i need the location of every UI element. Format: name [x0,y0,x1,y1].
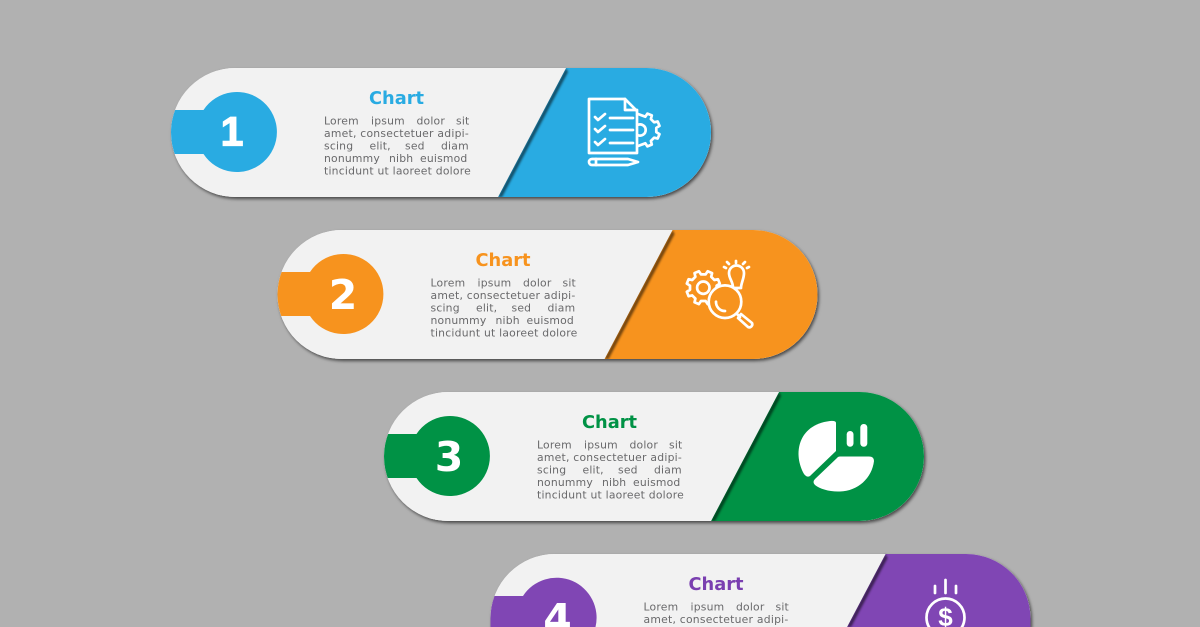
text block 4: ipsum [690,600,724,613]
text block 2: diam [548,301,575,314]
icon: gear, magnifier and bulb [687,261,752,327]
text block 4: Lorem [644,600,678,613]
text block 3: nibh [602,476,626,489]
text block 2: scing [430,301,460,314]
card shape 1 [171,68,711,197]
text block 2: amet, consectetuer adipi- [430,289,576,302]
text block 1: scing [324,139,353,152]
colored icon panel 3 [711,392,924,521]
text block 1: dolor [416,114,445,127]
text block 3: amet, consectetuer adipi- [537,451,682,464]
text block 1: nonummy [324,152,380,165]
number badge 3 [384,416,490,496]
text block 4: amet, consectetuer adipi- [644,613,788,626]
number 3: 3 [435,433,463,481]
text block 2: elit, [476,301,497,314]
text block 4: sit [776,600,789,613]
panel: step 4 [490,554,1030,627]
text block 1: diam [441,139,469,152]
light text panel 3 [384,392,779,521]
text block 2: euismod [526,314,574,327]
text block 3: sed [618,463,638,476]
text block 2: sit [562,276,576,289]
icon: checklist with gear [589,99,660,165]
colored icon panel 4 [847,554,1030,627]
text block 2: Lorem [430,276,465,289]
heading 1: Chart [369,88,424,109]
text block 1: ipsum [371,114,405,127]
text block 1: tincidunt ut laoreet dolore [324,164,471,177]
text block 3: scing [537,463,566,476]
card shape 2 [278,230,818,359]
text block 3: nonummy [537,476,593,489]
number badge 1 [171,92,277,172]
text block 2: tincidunt ut laoreet dolore [430,326,578,339]
card shape 4 [490,554,1030,627]
text block 4: dolor [736,600,765,613]
icon: pie chart with bars [799,421,874,492]
icon: dollar coin [926,580,964,627]
number 1: 1 [221,108,243,154]
text block 4 [644,600,789,626]
number badge 4 [490,578,597,627]
text block 1: amet, consectetuer adipi- [324,127,469,140]
text block 1: sit [456,114,469,127]
text block 2: ipsum [478,276,511,289]
text block 1: elit, [370,139,391,152]
heading 4: Chart [688,574,744,595]
panel: step 1 [171,68,711,197]
text block 3: euismod [633,476,680,489]
text block 2: nonummy [430,314,487,327]
text block 1: sed [405,139,425,152]
heading 3: Chart [582,412,638,433]
text block 3: Lorem [537,438,572,451]
panel: step 2 [278,230,818,359]
text block 2 [430,276,578,339]
text block 1: euismod [420,152,468,165]
text block 2: dolor [523,276,552,289]
number badge 2 [278,254,383,334]
text block 3: tincidunt ut laoreet dolore [537,488,684,501]
text block 3 [537,438,684,501]
light text panel 4 [490,554,886,627]
card shape 3 [384,392,924,521]
light text panel 2 [278,230,672,359]
text block 2: sed [512,301,531,314]
text block 1 [324,114,471,177]
text block 1: nibh [389,152,413,165]
text block 3: elit, [582,463,604,476]
text block 1: Lorem [324,114,359,127]
text block 3: sit [669,438,682,451]
text block 3: dolor [630,438,658,451]
colored icon panel 1 [498,68,711,197]
text block 2: nibh [496,314,520,327]
colored icon panel 2 [604,230,818,359]
panel: step 3 [384,392,924,521]
text block 3: diam [654,463,682,476]
heading 2: Chart [476,250,531,271]
number 2: 2 [329,271,357,319]
text block 3: ipsum [584,438,618,451]
light text panel 1 [171,68,566,197]
